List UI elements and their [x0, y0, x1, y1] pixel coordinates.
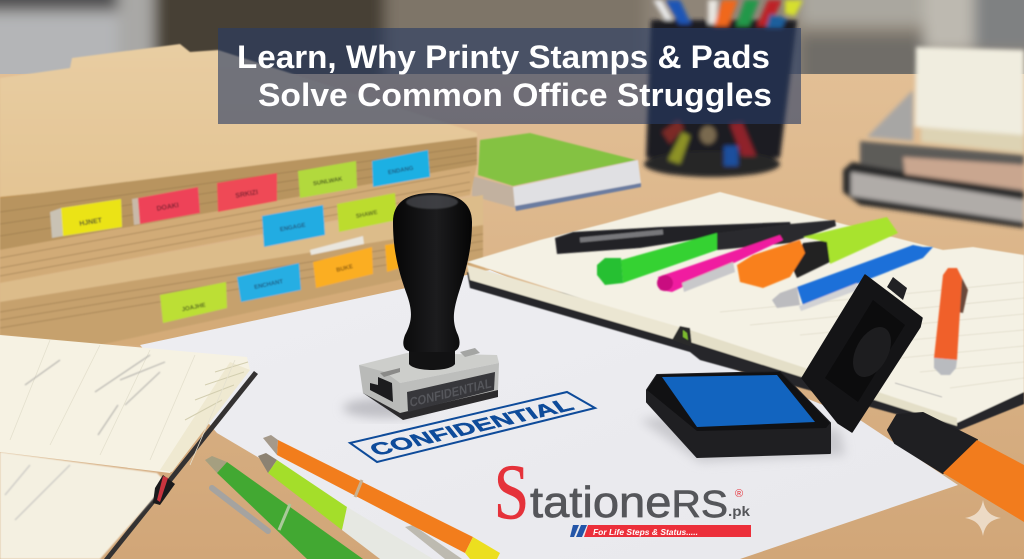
colored index tabs: ENCHANT — [254, 279, 284, 291]
top folder cover — [0, 44, 477, 200]
green marker — [717, 220, 836, 250]
pad base — [647, 372, 830, 457]
blue pen — [797, 245, 933, 305]
orange pen — [263, 435, 278, 455]
lime pen — [258, 453, 277, 473]
stacked books top right — [843, 47, 1024, 228]
white paper sheet — [140, 270, 958, 559]
title banner: Solve Common Office Struggles — [258, 77, 772, 113]
open notebook bottom left — [0, 335, 258, 559]
colored index tabs: ENGAGE — [280, 223, 306, 233]
green pen — [205, 456, 227, 473]
pens on notebook — [555, 217, 968, 375]
blurred office background — [0, 0, 1024, 90]
printed CONFIDENTIAL stamp mark: CONFIDENTIAL — [365, 396, 579, 460]
folder page stacks — [0, 137, 490, 346]
green closed notebook — [472, 133, 641, 211]
Stationers.pk logo: S — [494, 448, 529, 535]
stamp handle — [409, 345, 455, 370]
title banner — [218, 28, 801, 124]
colored index tabs: HJNET — [79, 217, 103, 228]
magenta pen — [658, 235, 783, 292]
rubber stamp — [343, 193, 499, 420]
colored index tabs: SUNLWAK — [313, 176, 344, 188]
title banner: Learn, Why Printy Stamps & Pads — [237, 39, 770, 75]
Stationers.pk logo: tationeRS — [530, 478, 728, 527]
colored index tabs — [50, 150, 430, 323]
colored index tabs: BUKE — [336, 264, 354, 274]
printed CONFIDENTIAL stamp mark — [350, 392, 595, 462]
Stationers.pk logo — [494, 448, 751, 537]
colored index tabs: SRKIZI — [235, 189, 259, 200]
stack of manila folders — [0, 44, 490, 346]
pens on bottom of desk — [205, 435, 500, 559]
colored index tabs: DOAKI — [156, 202, 179, 213]
stamp plate with reversed text: CONFIDENTIAL — [409, 375, 492, 410]
Stationers.pk logo: ® — [735, 488, 743, 500]
pen holder cup — [644, 0, 803, 177]
orange pen — [958, 278, 968, 313]
colored index tabs: ENDANG — [388, 166, 414, 176]
stamp base — [363, 385, 498, 420]
colored index tabs: SHAWE — [355, 210, 378, 220]
icon: sparkle watermark — [965, 500, 1001, 536]
orange highlighter bottom right — [888, 413, 1024, 522]
colored index tabs: JOAJHE — [181, 303, 206, 313]
open ruled notebook right — [467, 192, 1024, 431]
black pen — [555, 222, 792, 254]
blue ink pad with open lid — [640, 275, 922, 462]
blue ink surface — [662, 375, 815, 427]
orange and lime highlighter — [792, 240, 830, 278]
Stationers.pk logo: For Life Steps & Status..... — [593, 527, 698, 537]
pad lid — [802, 275, 922, 432]
Stationers.pk logo: .pk — [728, 503, 750, 519]
